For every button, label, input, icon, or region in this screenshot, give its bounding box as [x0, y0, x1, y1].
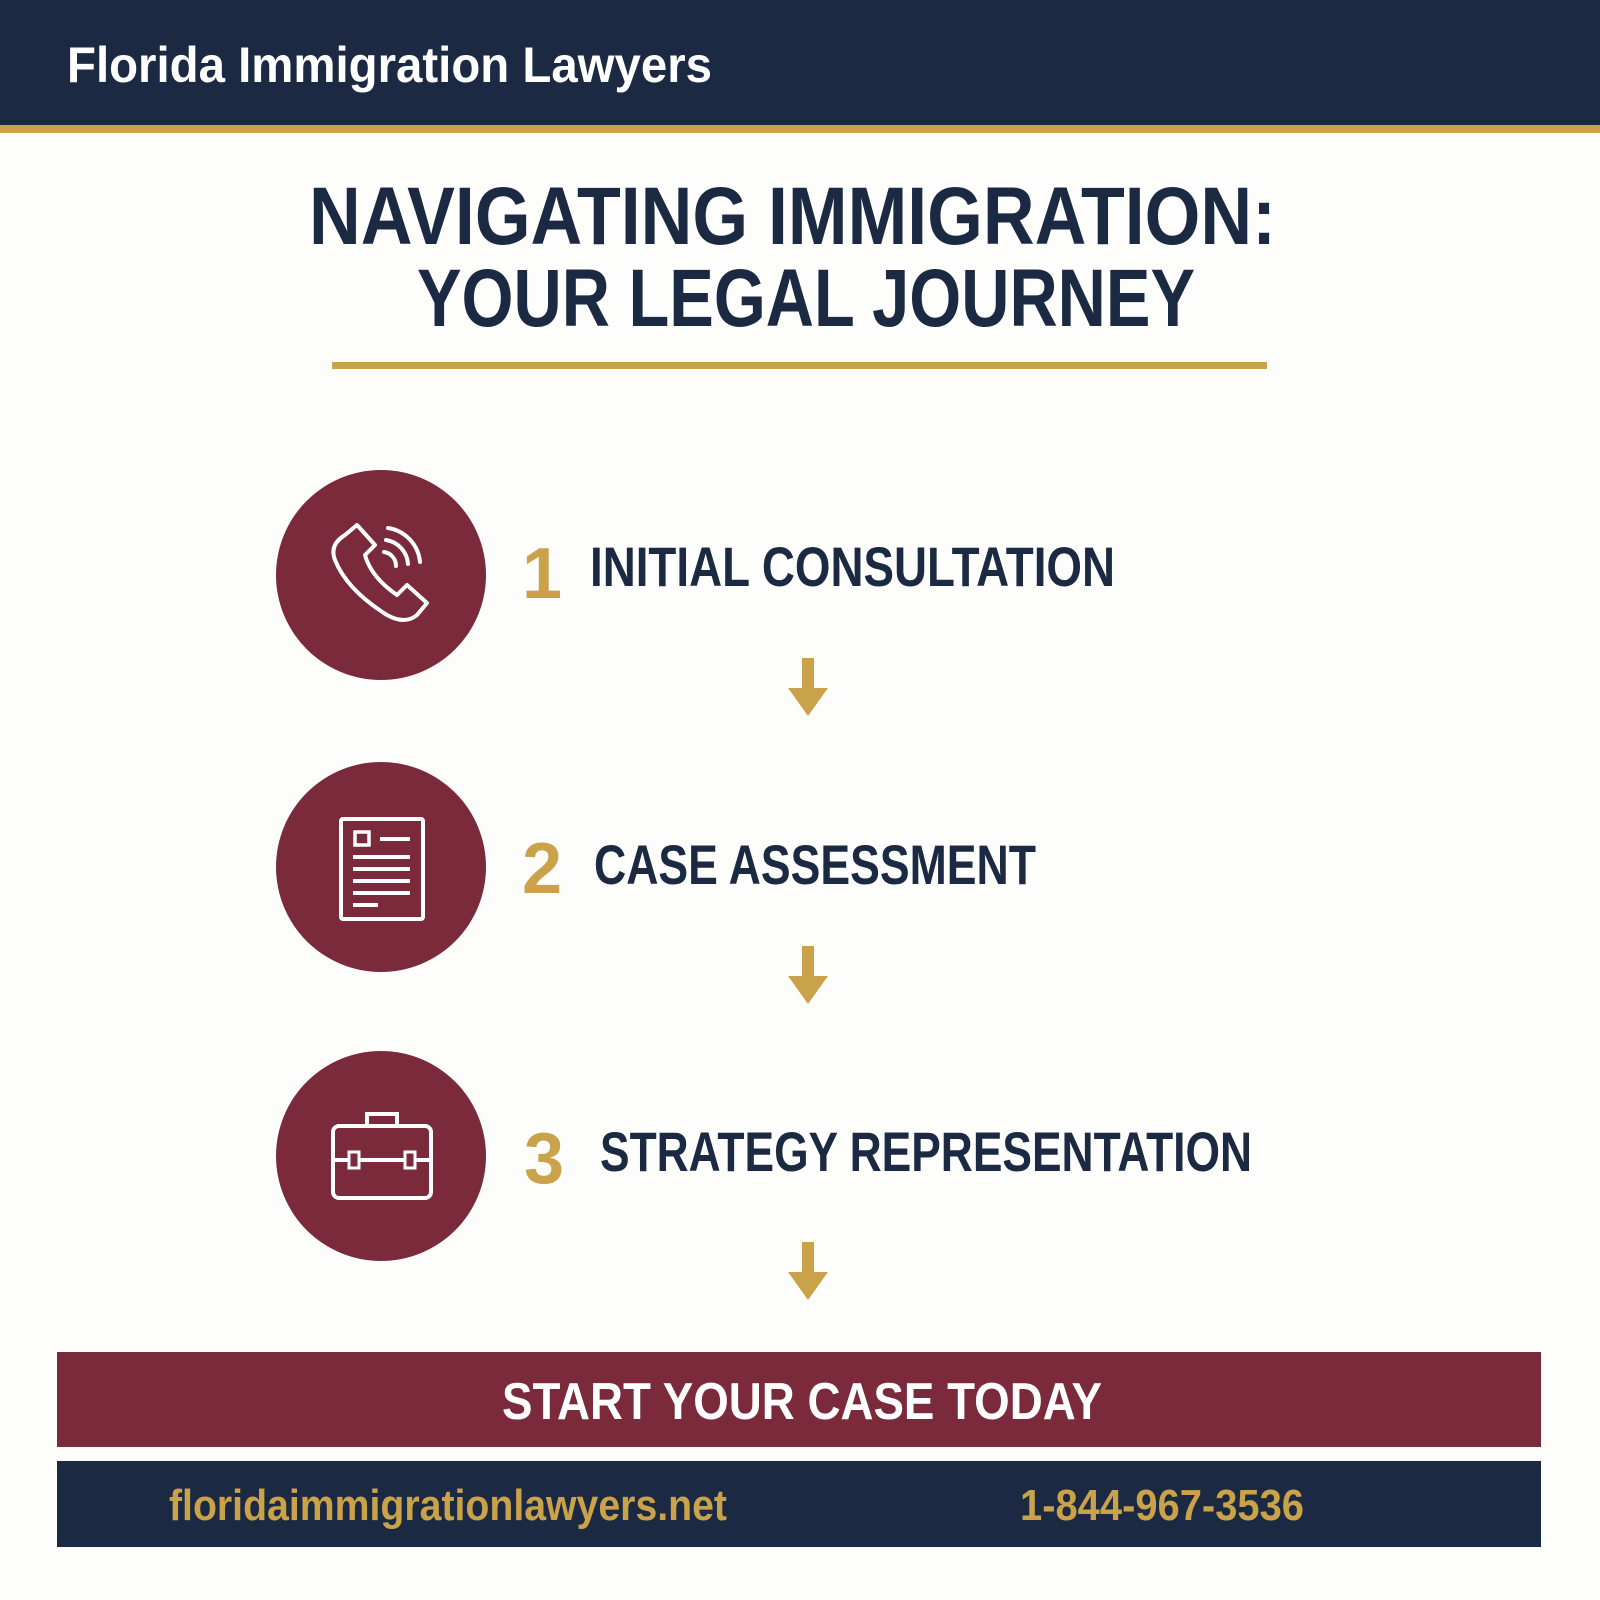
icon: phone [276, 470, 486, 680]
label: CASE ASSESSMENT [594, 833, 1036, 896]
arrow 2 [788, 946, 828, 1004]
header bar [0, 0, 1600, 133]
number 3: 3 [524, 1119, 564, 1199]
step 2 [276, 762, 1036, 972]
title: NAVIGATING IMMIGRATION: [309, 171, 1276, 262]
step 1 [276, 470, 1115, 680]
footer contact bar [57, 1461, 1541, 1547]
website: floridaimmigrationlawyers.net [169, 1481, 727, 1530]
icon: briefcase [276, 1051, 486, 1261]
title [309, 171, 1276, 344]
title underline [332, 362, 1267, 369]
label: INITIAL CONSULTATION [590, 535, 1115, 598]
header text: Florida Immigration Lawyers [67, 37, 712, 93]
phone: 1-844-967-3536 [1020, 1481, 1304, 1530]
CTA bar [57, 1352, 1541, 1447]
icon: document [276, 762, 486, 972]
label: STRATEGY REPRESENTATION [600, 1120, 1252, 1183]
CTA bar: START YOUR CASE TODAY [502, 1373, 1102, 1431]
step 3 [276, 1051, 1252, 1261]
arrow 1 [788, 658, 828, 716]
title: YOUR LEGAL JOURNEY [417, 253, 1195, 344]
number 1: 1 [522, 534, 562, 614]
number 2: 2 [522, 829, 562, 909]
arrow 3 [788, 1242, 828, 1300]
